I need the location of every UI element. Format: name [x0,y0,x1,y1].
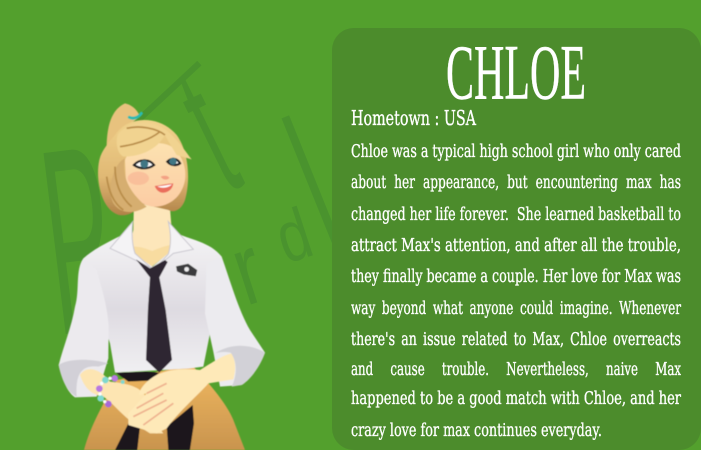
hair tie [129,113,141,118]
watermark: script lettering [29,20,360,392]
face [125,143,185,207]
nose [161,176,169,180]
mouth [155,183,173,193]
left sleeve [59,258,109,397]
jacket tied at waist [84,365,245,450]
neck [128,200,173,267]
finger lines [133,383,173,425]
black undershirt [115,405,194,450]
hair strands [107,127,165,210]
waistband [116,372,159,382]
shirt torso [83,232,222,373]
watermark: script lettering: t [151,29,264,229]
necktie [136,259,172,373]
right sleeve [205,257,265,387]
panel: profile background [332,28,701,450]
ponytail [107,103,140,153]
bracelet [96,375,125,407]
biography text block [351,142,681,441]
watermark: script lettering: r [218,212,276,326]
hometown: Hometown : USA [351,106,476,130]
watermark: script lettering: P [29,91,128,392]
title: CHLOE [446,28,586,116]
shirt badge [176,263,198,277]
left forearm and hand [80,369,163,433]
blush [128,172,149,185]
right forearm and hand [128,353,235,433]
character illustration: Chloe [59,103,265,450]
watermark: script lettering: d [266,192,321,279]
fringe [117,122,192,159]
eyes [134,160,154,168]
watermark: script lettering: l [263,82,360,281]
collar [110,222,193,268]
hair back [98,120,188,215]
biography text block: crazy love for max continues everyday. [351,421,602,441]
right cuff [215,346,265,387]
watermark: script lettering: — [92,20,229,158]
side lock [111,158,147,212]
